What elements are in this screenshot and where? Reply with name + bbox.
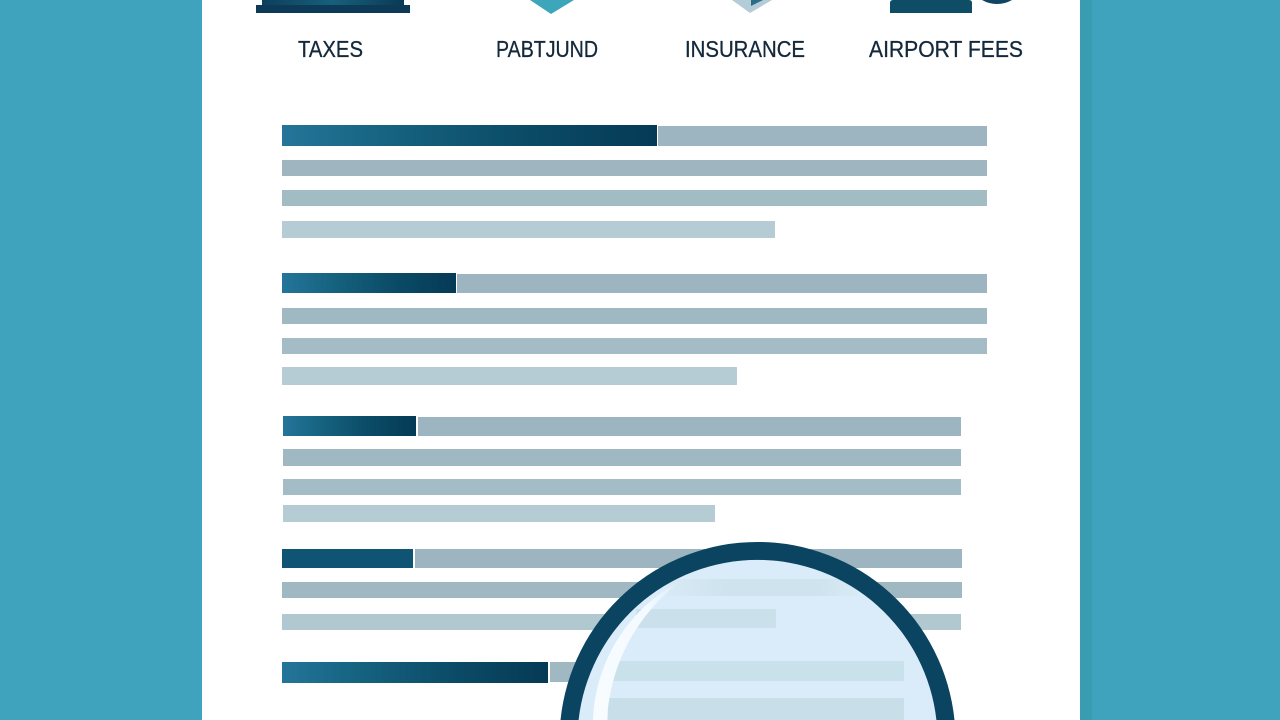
- label: taxes: TAXES: [298, 36, 363, 62]
- icon: taxes building base: [256, 0, 410, 13]
- icon: insurance shield: [732, 0, 772, 13]
- glass highlight: [593, 580, 682, 720]
- magnified lines: [608, 579, 904, 720]
- icon: airport desk: [890, 0, 1012, 13]
- label: refund: PABTJUND: [496, 36, 598, 62]
- label: airport fees: AIRPORT FEES: [869, 36, 1023, 62]
- text block 3: [283, 416, 961, 522]
- document panel: [202, 0, 1080, 720]
- label: insurance: INSURANCE: [685, 36, 805, 62]
- icon: refund shield: [530, 0, 574, 14]
- lens ring: [561, 542, 954, 720]
- text block 1: [282, 125, 987, 238]
- magnifying glass: [561, 542, 954, 720]
- text block 2: [282, 273, 987, 385]
- text block 4: [282, 549, 962, 630]
- panel shadow: [1080, 0, 1092, 720]
- lens: [579, 560, 936, 720]
- text block 5: [282, 662, 610, 683]
